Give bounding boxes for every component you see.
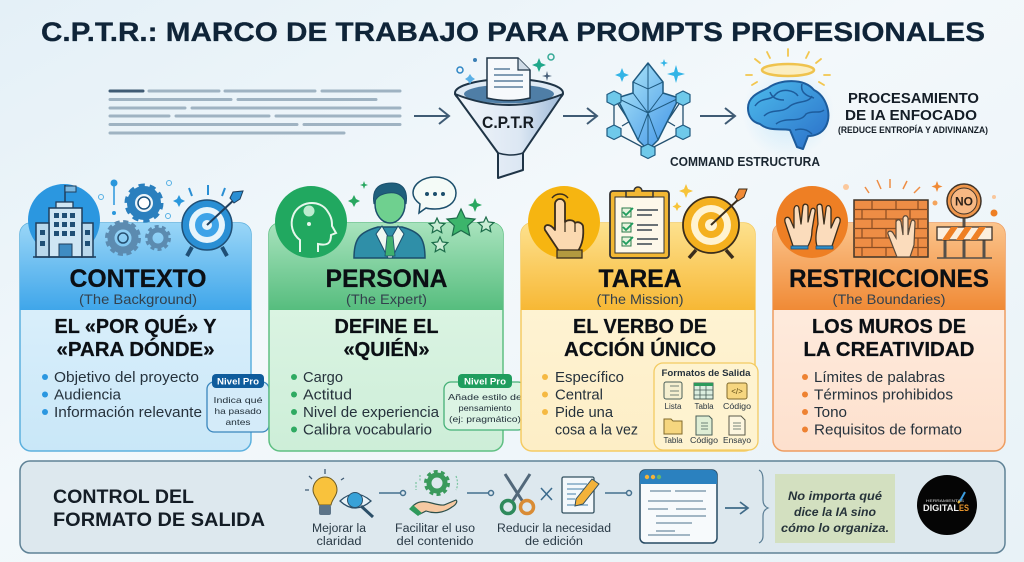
heading: control del formato: CONTROL DEL: [53, 487, 194, 508]
icon: clipboard checklist: [610, 187, 669, 258]
title: C.P.T.R.: MARCO DE TRABAJO PARA PROMPTS PROFESIONALES: [41, 17, 985, 47]
panel: formatos de salida: Código: [690, 436, 719, 445]
icon: gears: [107, 186, 170, 254]
tagline: por qué y para dónde: [54, 315, 217, 361]
tagline: verbo de acción único: ACCIÓN ÚNICO: [564, 337, 716, 361]
bullet list: persona: Actitud: [303, 388, 352, 404]
labels: benefits: [312, 523, 611, 548]
bullet list: restricciones: Tono: [814, 405, 847, 421]
bullet list: tarea: Central: [555, 388, 603, 404]
panel: formatos de salida: Tabla: [663, 436, 683, 445]
bullet list: restricciones: Requisitos de formato: [814, 422, 962, 438]
callout: nivel pro contexto: [207, 374, 269, 432]
subheading: the background: (The Background): [79, 291, 197, 307]
subheading: the expert: (The Expert): [346, 291, 427, 307]
arrow: text to funnel: [414, 108, 449, 124]
bullet list: contexto: Información relevante: [54, 405, 202, 421]
icon: funnel with document: [455, 54, 563, 178]
tagline: por qué y para dónde: EL «POR QUÉ» Y: [54, 315, 217, 338]
label: command estructura: COMMAND ESTRUCTURA: [670, 155, 820, 169]
bullet list: tarea: [542, 370, 638, 438]
icon: no sign and barrier: NO: [955, 194, 973, 208]
callout: nivel pro contexto: Nivel Pro: [217, 376, 259, 388]
labels: benefits: Mejorar la: [312, 523, 367, 535]
icon: brain with halo: [742, 49, 834, 158]
heading: control del formato: FORMATO DE SALIDA: [53, 510, 265, 531]
connector: [467, 492, 488, 494]
connector: [379, 492, 400, 494]
subheading: the boundaries: (The Boundaries): [832, 291, 946, 307]
subheading: the mission: (The Mission): [596, 291, 684, 307]
bullet list: restricciones: Términos prohibidos: [814, 388, 953, 404]
tagline: verbo de acción único: EL VERBO DE: [573, 316, 707, 338]
callout: message: [775, 474, 895, 543]
heading: tarea: TAREA: [598, 265, 682, 293]
tagline: por qué y para dónde: «PARA DÓNDE»: [56, 337, 214, 361]
logo: herramientas digitales: DIGITAL: [923, 503, 959, 514]
callout: message: cómo lo organiza.: [781, 521, 889, 535]
panel: persona: [269, 177, 525, 451]
heading: restricciones: RESTRICCIONES: [789, 265, 989, 293]
bullet list: contexto: Objetivo del proyecto: [54, 370, 199, 386]
heading: control del formato: [53, 487, 265, 531]
logo: herramientas digitales: ES: [959, 503, 969, 514]
panel: contexto: [20, 180, 269, 451]
callout: message: No importa qué: [788, 489, 882, 503]
callout: nivel pro persona: Añade estilo de: [448, 392, 522, 402]
pipeline: unstructured text lines: [110, 91, 400, 133]
icon: no sign and barrier: [932, 181, 998, 258]
label: procesamiento de IA enfocado: (REDUCE ENTROPÍA Y ADIVINANZA): [838, 125, 988, 135]
panel: tarea: [521, 184, 758, 451]
funnel label: C.P.T.R: [482, 113, 534, 132]
bullet list: persona: Nivel de experiencia: [303, 405, 440, 421]
panel: formatos de salida: Formatos de Salida: [662, 368, 752, 378]
bullet list: tarea: cosa a la vez: [555, 422, 638, 438]
tagline: muros de la creatividad: LA CREATIVIDAD: [804, 339, 974, 361]
labels: benefits: Reducir la necesidad: [497, 523, 611, 535]
logo: herramientas digitales: [917, 475, 977, 535]
connector: [605, 492, 626, 494]
tagline: define el quién: [334, 316, 438, 361]
bullet list: persona: [291, 370, 440, 438]
panel: restricciones: [773, 179, 1005, 451]
icon: business person: [354, 183, 425, 258]
panel: formatos de salida: Ensayo: [723, 436, 752, 445]
tagline: define el quién: «QUIÉN»: [344, 338, 430, 361]
callout: nivel pro persona: [444, 374, 525, 430]
bullet list: restricciones: [802, 370, 962, 438]
icon: bulb and eye: [305, 469, 373, 517]
brace: [759, 470, 768, 543]
bullet list: contexto: Audiencia: [54, 388, 122, 404]
icon: browser window: [640, 470, 717, 543]
panel: formatos de salida: Lista: [665, 402, 682, 411]
bullet list: restricciones: Límites de palabras: [814, 370, 945, 386]
label: procesamiento de IA enfocado: DE IA ENFOCADO: [845, 108, 977, 124]
callout: nivel pro persona: pensamiento: [458, 403, 512, 413]
labels: benefits: Facilitar el uso: [395, 523, 475, 535]
arrow: window to message: [725, 502, 748, 514]
labels: benefits: claridad: [316, 536, 362, 548]
icon: target tarea: [672, 184, 747, 258]
panel: control del formato de salida: [20, 461, 1005, 553]
callout: message: dice la IA sino: [794, 505, 876, 519]
callout: nivel pro contexto: ha pasado: [214, 406, 262, 416]
label: procesamiento de IA enfocado: PROCESAMIENTO: [848, 91, 979, 107]
arrow: funnel to crystal: [563, 108, 597, 124]
icon: building: [28, 184, 100, 257]
callout: nivel pro contexto: antes: [226, 417, 250, 427]
icon: raised hands: [776, 186, 848, 258]
tagline: muros de la creatividad: [804, 316, 974, 361]
heading: contexto: CONTEXTO: [70, 265, 206, 293]
icon: speech bubble: [413, 177, 456, 213]
icon: head with idea: [275, 186, 347, 258]
icon: hand with gear: [409, 472, 458, 516]
arrow: crystal to brain: [700, 108, 735, 124]
panel: formatos de salida: [654, 363, 758, 450]
icon: crystal with nodes: [607, 59, 690, 158]
callout: nivel pro persona: (ej: pragmático): [449, 414, 521, 424]
icon: pointing hand: [528, 186, 600, 258]
icon: brick wall: [843, 179, 928, 257]
icon: scissors and document: [502, 474, 599, 514]
bullet list: persona: Calibra vocabulario: [303, 422, 432, 438]
callout: nivel pro contexto: Indica qué: [214, 395, 263, 405]
panel: formatos de salida: Código: [723, 402, 752, 411]
icon: stars: [429, 209, 494, 252]
bullet list: tarea: Específico: [555, 370, 624, 386]
icon: target: [182, 185, 243, 256]
label: procesamiento de IA enfocado: [838, 91, 988, 135]
bullet list: contexto: [42, 370, 202, 421]
panel: formatos de salida: </>: [731, 387, 743, 396]
callout: nivel pro persona: Nivel Pro: [464, 376, 506, 388]
bullet list: persona: Cargo: [303, 370, 343, 386]
tagline: verbo de acción único: [564, 316, 716, 361]
tagline: define el quién: DEFINE EL: [334, 316, 438, 338]
bullet list: tarea: Pide una: [555, 405, 614, 421]
heading: persona: PERSONA: [326, 265, 448, 293]
panel: formatos de salida: Tabla: [694, 402, 714, 411]
tagline: muros de la creatividad: LOS MUROS DE: [812, 316, 966, 338]
logo: herramientas digitales: HERRAMIENTAS: [926, 499, 965, 503]
labels: benefits: de edición: [525, 536, 583, 548]
labels: benefits: del contenido: [396, 536, 474, 548]
